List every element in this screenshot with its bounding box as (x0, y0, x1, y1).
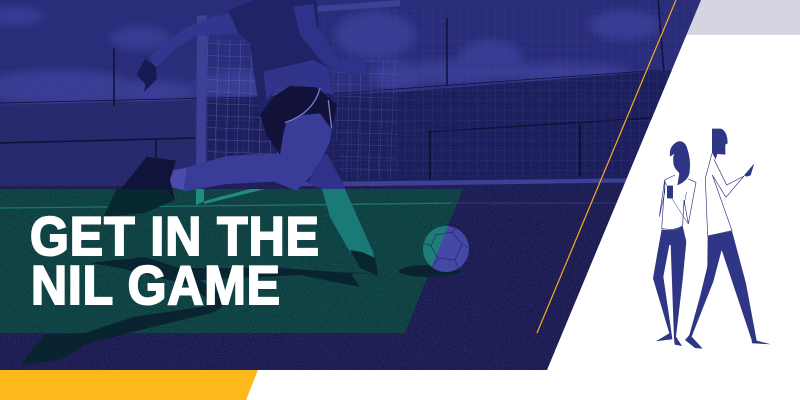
dark ground (0, 186, 624, 370)
shirt lit hem (263, 60, 333, 100)
grey corner band (680, 0, 800, 35)
standing leg teal (322, 189, 374, 258)
man head (712, 129, 728, 159)
player shadow (20, 257, 461, 365)
goal post base (196, 189, 265, 205)
shorts (260, 86, 337, 155)
illustration: two people on phones (653, 129, 771, 349)
man legs (685, 231, 771, 349)
heading line 2: NIL GAME (31, 255, 280, 317)
fence posts and rails (0, 0, 664, 182)
man phone hand (744, 163, 754, 177)
goal frame (196, 0, 660, 190)
shoe (103, 157, 176, 217)
standing leg upper (308, 153, 345, 189)
goal net (207, 0, 700, 180)
heading (30, 206, 319, 317)
sock (170, 168, 186, 190)
woman phone (667, 186, 673, 198)
woman hair (670, 141, 690, 185)
man shirt outline (705, 153, 744, 236)
soccer ball (423, 226, 469, 272)
player (103, 0, 367, 217)
sky (0, 0, 710, 120)
right arm (293, 4, 367, 75)
woman shirt outline (659, 175, 696, 230)
woman legs (653, 226, 686, 346)
cleat (350, 250, 378, 276)
shirt (228, 0, 333, 115)
yellow diagonal line (537, 0, 676, 333)
woman (653, 141, 696, 346)
shoe green tint (103, 189, 175, 217)
green tinted turf (0, 189, 463, 333)
yellow bottom bar (0, 370, 258, 400)
heading line 1: GET IN THE (30, 206, 319, 268)
left arm (150, 12, 242, 68)
stadium stand (206, 70, 672, 190)
man (685, 129, 771, 349)
thigh and back leg (183, 113, 332, 192)
clouds (0, 7, 661, 106)
glove hand (137, 58, 157, 92)
woman arm lines (665, 182, 688, 224)
field line (0, 203, 463, 208)
shorts trim (285, 88, 332, 128)
